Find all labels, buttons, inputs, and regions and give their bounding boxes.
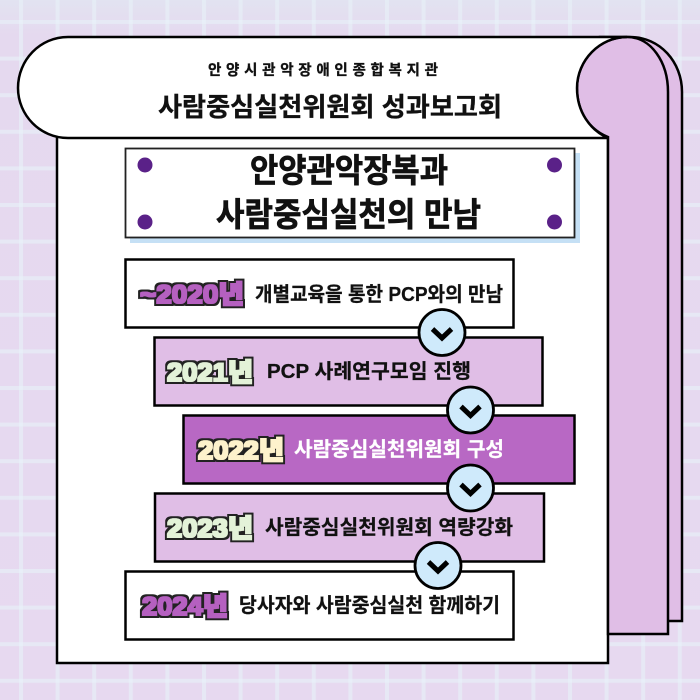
timeline step: 2021: 2021년	[167, 359, 253, 387]
timeline step: 2024: 2024년	[142, 593, 228, 621]
timeline step: 2020: 개별교육을 통한 PCP와의 만남	[255, 283, 503, 306]
timeline step: 2022: 사람중심실천위원회 구성	[294, 438, 504, 461]
arrow: 2022 to 2023	[448, 465, 494, 511]
timeline step: 2024	[126, 572, 514, 640]
decorative dots	[138, 158, 562, 230]
back scroll roll	[600, 37, 682, 621]
main title line 1: 안양관악장복과	[250, 152, 448, 189]
timeline step: 2021: PCP 사례연구모임 진행	[267, 360, 471, 383]
timeline step: 2020: ~2020년	[140, 281, 244, 309]
arrow: 2020 to 2021	[419, 310, 465, 356]
scroll header banner	[18, 37, 627, 138]
timeline step: 2023	[155, 494, 544, 562]
timeline step: 2020	[126, 260, 514, 328]
organisation name: 안양시관악장애인종합복지관	[208, 62, 438, 79]
timeline step: 2024: 당사자와 사람중심실천 함께하기	[239, 594, 500, 617]
timeline step: 2021	[154, 338, 542, 406]
timeline step: 2023: 사람중심실천위원회 역량강화	[265, 516, 513, 539]
main title box	[126, 148, 580, 243]
timeline step: 2022	[184, 416, 574, 484]
arrow: 2021 to 2022	[448, 387, 494, 433]
front scroll roll	[577, 37, 668, 634]
timeline step: 2022: 2022년	[198, 437, 284, 465]
timeline step: 2023: 2023년	[167, 515, 253, 543]
panel: white scroll body	[57, 130, 608, 663]
report title: 사람중심실천위원회 성과보고회	[158, 92, 502, 122]
arrow: 2023 to 2024	[415, 542, 461, 588]
main title line 2: 사람중심실천의 만남	[216, 196, 481, 233]
